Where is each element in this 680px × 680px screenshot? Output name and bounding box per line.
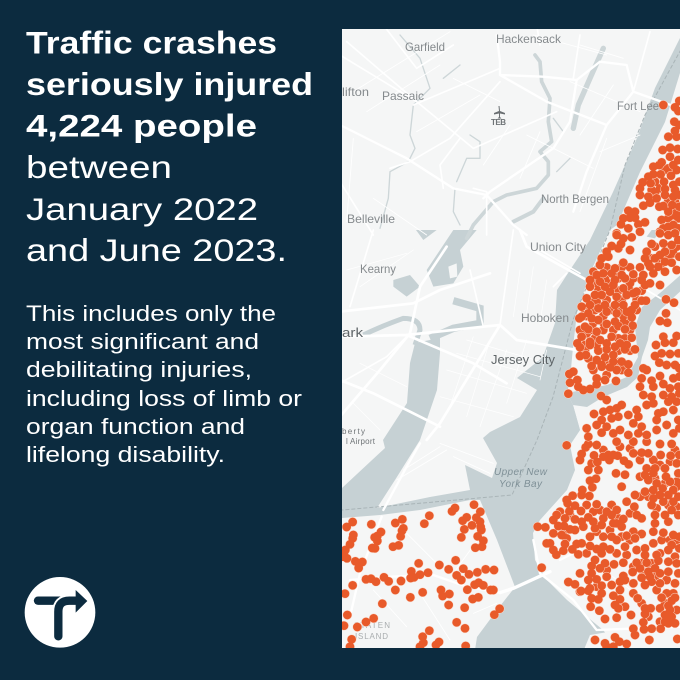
headline: Traffic crashes	[26, 24, 277, 60]
headline	[26, 24, 313, 268]
map labels: l Airport	[346, 437, 376, 446]
map labels: Hoboken	[521, 311, 569, 325]
map labels: Hackensack	[496, 32, 562, 46]
body text: including loss of limb or	[26, 386, 302, 411]
map labels: ark	[342, 325, 364, 340]
map labels: Kearny	[360, 262, 396, 276]
body text: debilitating injuries,	[26, 357, 252, 382]
map labels: lifton	[342, 85, 369, 99]
map labels: berty	[342, 427, 365, 436]
map	[340, 25, 680, 652]
map labels: Passaic	[382, 89, 424, 103]
headline: 4,224 people	[26, 108, 257, 144]
headline: and June 2023.	[26, 232, 287, 268]
map labels: Upper New	[494, 467, 548, 478]
crash dots: upper Manhattan	[617, 101, 679, 233]
map labels: Union City	[530, 240, 586, 254]
land: south Brooklyn shore	[584, 632, 618, 648]
headline: January 2022	[26, 191, 258, 227]
rivers	[380, 35, 603, 238]
water: Hackensack meadows	[363, 230, 660, 345]
headline: seriously injured	[26, 66, 313, 102]
body text: organ function and	[26, 414, 245, 439]
water: Hudson River	[517, 30, 680, 450]
map labels: Jersey City	[491, 352, 555, 367]
map labels: STATEN	[354, 621, 390, 630]
map labels: Belleville	[347, 212, 395, 226]
map labels	[342, 32, 659, 641]
map labels: TEB	[491, 118, 506, 127]
map labels: North Bergen	[541, 192, 609, 206]
logo	[25, 577, 95, 648]
water: Upper New York Bay	[342, 405, 620, 650]
crash dots: Staten Island and Brooklyn	[342, 442, 679, 647]
map labels: York Bay	[499, 479, 543, 490]
body text: This includes only the	[26, 301, 276, 326]
water: East River	[567, 272, 680, 407]
crash dots: Manhattan, Queens and north Brooklyn	[568, 232, 679, 437]
headline: between	[26, 149, 172, 185]
map labels: Fort Lee	[617, 99, 659, 113]
map labels: ISLAND	[355, 632, 388, 641]
body text	[26, 301, 302, 467]
icon: airport plane	[494, 106, 505, 118]
water: Newark Bay	[342, 338, 440, 508]
roads	[340, 25, 680, 235]
body text: most significant and	[26, 329, 259, 354]
body text: lifelong disability.	[26, 442, 225, 467]
state boundary	[342, 44, 680, 510]
map labels: Garfield	[405, 40, 445, 54]
